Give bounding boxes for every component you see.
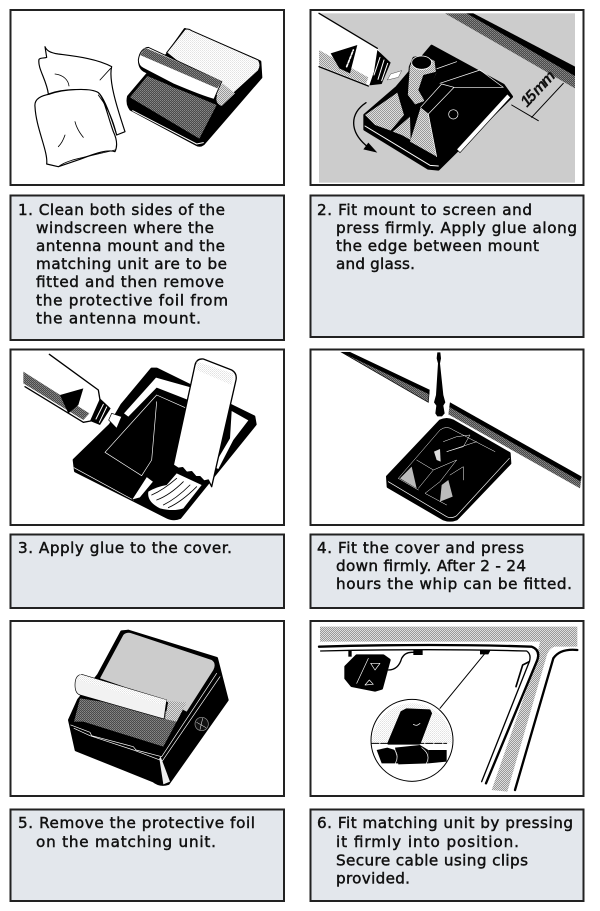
icon: glue bead on cover (148, 473, 202, 510)
panel: step 2 illustration (310, 10, 584, 185)
text block: step 1: windscreen where the (36, 219, 214, 237)
icon: matching unit and cable (346, 650, 491, 690)
text block: step 5: on the matching unit. (36, 833, 216, 851)
text block: step 2: 2. Fit mount to screen and (317, 201, 532, 219)
icon: glue tube (23, 354, 122, 428)
icon: glue tube (319, 13, 402, 86)
text block: step 6: 6. Fit matching unit by pressing (317, 814, 573, 832)
text block: step 1: fitted and then remove (36, 273, 224, 291)
callout: cable clip detail (371, 653, 485, 781)
windscreen edge (342, 352, 582, 488)
text block: step 6: provided. (336, 870, 410, 888)
text block: step 5 (10, 810, 284, 901)
text block: step 3: 3. Apply glue to the cover. (18, 539, 232, 557)
panel: step 6 illustration (310, 621, 584, 796)
text block: step 1: antenna mount and the (36, 237, 225, 255)
dimension: 15 mm (512, 68, 563, 121)
text block: step 6: it firmly into position. (336, 833, 519, 851)
windscreen surface and edge (319, 13, 575, 183)
panel: step 1 illustration (10, 10, 284, 185)
text block: step 2: the edge between mount (336, 237, 539, 255)
icon: antenna mount with glue edge (365, 46, 512, 169)
dimension: 15 mm: 15 mm (517, 68, 559, 111)
text block: step 4: down firmly. After 2 - 24 (336, 557, 526, 575)
text block: step 1: 1. Clean both sides of the (18, 201, 225, 219)
text block: step 1 (10, 196, 284, 340)
panel: step 3 illustration (10, 350, 284, 525)
text block: step 2: press firmly. Apply glue along (336, 219, 577, 237)
icon: spatula (173, 359, 236, 487)
icon: whip antenna (434, 352, 445, 416)
icon: fitted mount (387, 419, 510, 520)
text block: step 4 (310, 534, 584, 608)
text block: step 1: the antenna mount. (36, 310, 201, 328)
text block: step 1: the protective foil from (36, 292, 228, 310)
arrow: rotate direction (354, 103, 377, 153)
text block: step 6: Secure cable using clips (336, 852, 528, 870)
windscreen frame and shaded band (319, 627, 577, 792)
icon: antenna mount pad with foil (128, 29, 261, 145)
text block: step 4: hours the whip can be fitted. (336, 575, 572, 593)
text block: step 6 (310, 810, 584, 901)
text block: step 1: matching unit are to be (36, 255, 227, 273)
icon: cleaning cloths (35, 47, 125, 167)
text block: step 3 (10, 534, 284, 608)
panel: step 4 illustration (310, 350, 584, 525)
text block: step 2 (310, 196, 584, 337)
text block: step 5: 5. Remove the protective foil (18, 814, 255, 832)
text block: step 2: and glass. (336, 255, 415, 273)
text block: step 4: 4. Fit the cover and press (317, 539, 524, 557)
icon: mount cover (74, 369, 255, 519)
icon: matching unit with foil (69, 631, 227, 785)
panel: step 5 illustration (10, 621, 284, 796)
